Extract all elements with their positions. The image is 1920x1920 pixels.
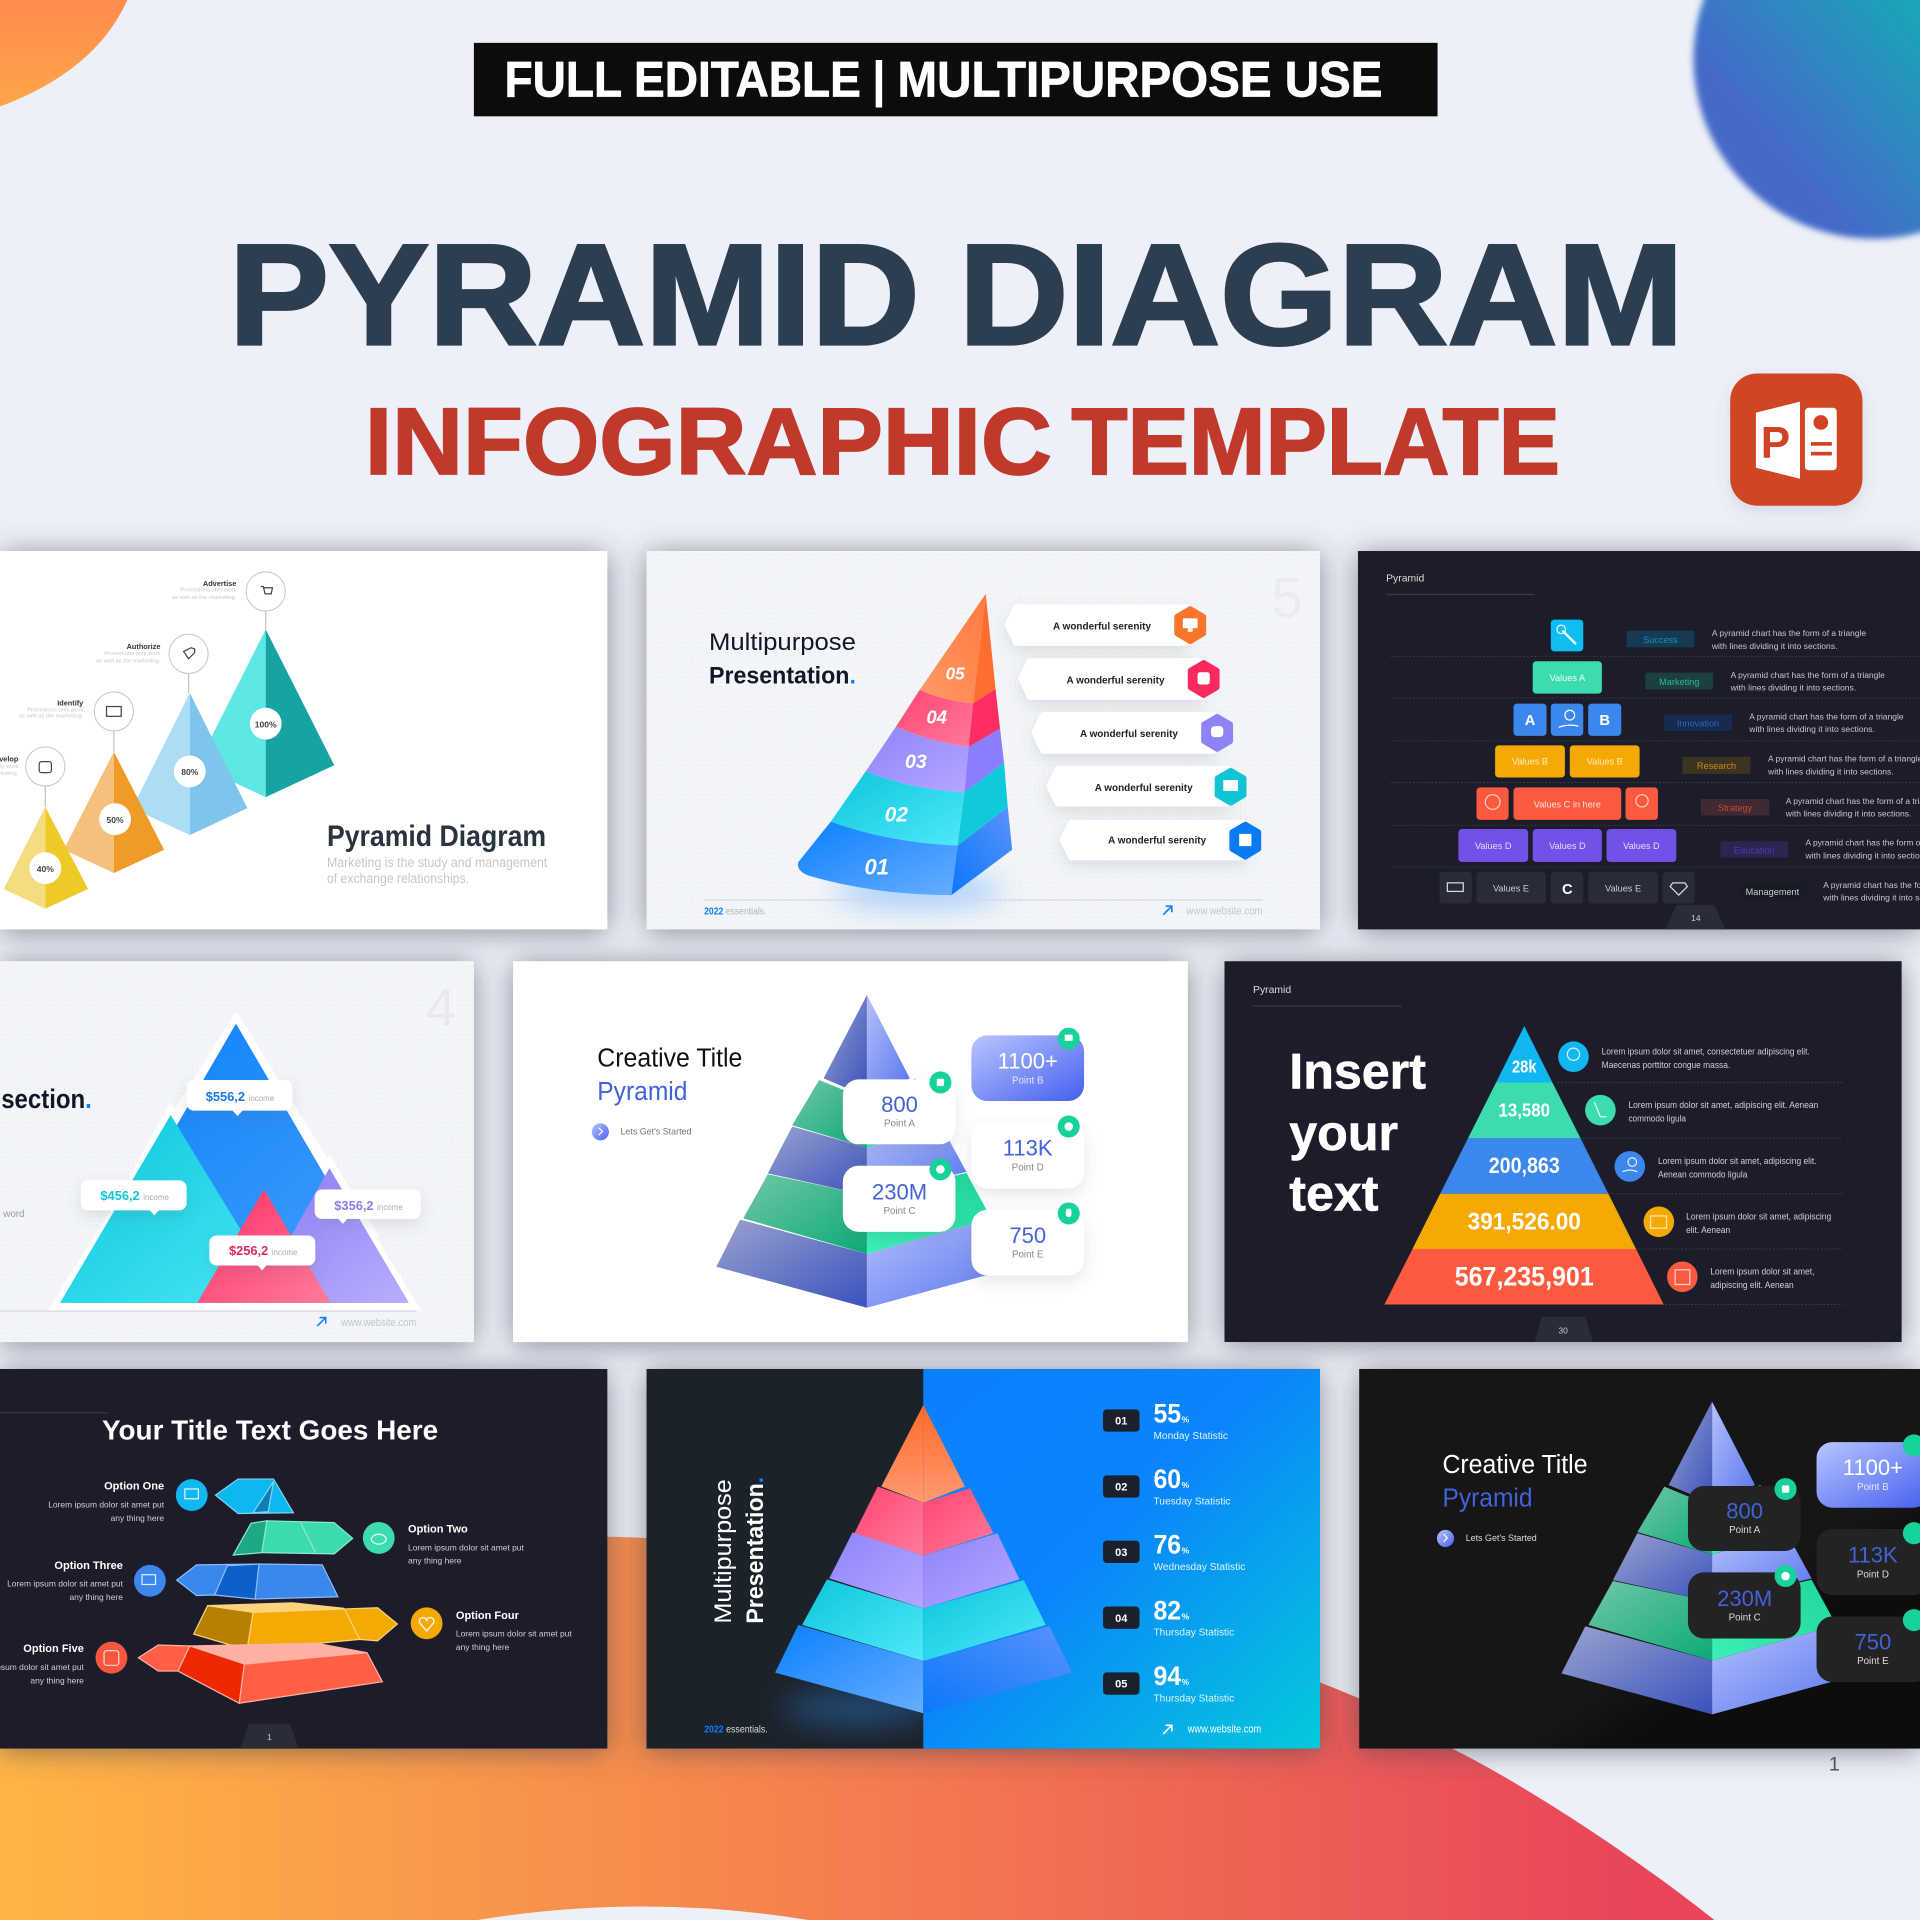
- 3D stepped pyramid: [716, 995, 1018, 1308]
- slide label: Pyramid: [1253, 985, 1291, 996]
- pyramid piece: yellow: [194, 1603, 397, 1650]
- card: 750 Point E: Point E: [1857, 1656, 1889, 1667]
- card: 800 Point A: 800: [881, 1092, 918, 1117]
- percentage badges: 100%: [255, 719, 277, 729]
- slide background: [1224, 961, 1902, 1342]
- blue triangle: [73, 1024, 399, 1303]
- card: 113K Point D: [971, 1116, 1084, 1188]
- option pills: [1008, 607, 1243, 857]
- bottom white arc: [478, 1907, 808, 1920]
- pyramid level numbers: 04: [927, 707, 947, 728]
- panel: creative title light slide: [513, 961, 1188, 1342]
- row 6 blocks: Values D: [1623, 841, 1660, 851]
- decorative blue corner blob: [1693, 0, 1920, 239]
- slide background: [1359, 1369, 1920, 1749]
- slide heading: your: [1289, 1105, 1398, 1161]
- statistic values: 76: [1153, 1530, 1181, 1560]
- slide description: [327, 855, 548, 886]
- footer rule: [0, 1310, 416, 1312]
- card: 800 Point A: [1688, 1478, 1801, 1551]
- option labels: any thing here: [408, 1556, 462, 1566]
- pyramid values: 13,580: [1499, 1100, 1550, 1121]
- pyramid values: 391,526.00: [1468, 1208, 1581, 1235]
- option icons: [96, 1479, 443, 1674]
- percentage badges: 80%: [181, 767, 199, 777]
- statistic values: 94: [1153, 1661, 1181, 1691]
- step labels: as well as the marketing.: [19, 714, 84, 720]
- pyramid piece: blue: [177, 1564, 338, 1599]
- row dividers: [1558, 1082, 1843, 1304]
- panel: pyramid diagram slide: [0, 551, 607, 929]
- row descriptions: with lines dividing it into sections.: [1785, 809, 1911, 819]
- option labels: Lorem ipsum dolor sit amet put: [48, 1500, 165, 1510]
- option labels: Option Five: [23, 1643, 84, 1655]
- panel: statistics split slide: [647, 1369, 1320, 1749]
- statistic values: %: [1182, 1611, 1190, 1621]
- row descriptions: elit. Aenean: [1686, 1225, 1730, 1235]
- pyramid level numbers: 05: [946, 664, 965, 684]
- card: 750 Point E: [1817, 1609, 1920, 1682]
- slide heading: [1442, 1451, 1588, 1513]
- 3D stepped pyramid: [1561, 1402, 1863, 1714]
- slide footer: www.website.com: [1186, 906, 1262, 918]
- slide footer: www.website.com: [1187, 1724, 1261, 1736]
- row descriptions: Aenean commodo ligula: [1658, 1169, 1747, 1179]
- percentage badges: [29, 708, 282, 884]
- option labels: any thing here: [69, 1592, 123, 1602]
- slide heading: Multipurpose: [709, 629, 856, 656]
- pyramid piece: cyan: [216, 1479, 293, 1513]
- category tags: Innovation: [1677, 719, 1719, 729]
- stacked pyramid: [1384, 1026, 1664, 1304]
- step labels: Promotions only work: [27, 707, 83, 713]
- row descriptions: adipiscing elit. Aenean: [1710, 1280, 1794, 1290]
- page tab: [1535, 1317, 1593, 1342]
- start button: Lets Get's Started: [620, 1126, 691, 1136]
- category tags: Research: [1697, 761, 1736, 771]
- slide footer: 2022 essentials.: [704, 907, 767, 918]
- card: 800 Point A: [843, 1071, 955, 1144]
- step labels: Authorize: [127, 642, 160, 651]
- white triangle backing: [48, 1011, 421, 1310]
- category tags: [1627, 631, 1806, 900]
- slide footer: www.website.com: [340, 1317, 416, 1329]
- card: 750 Point E: Point E: [1012, 1250, 1044, 1261]
- pill labels: A wonderful serenity: [1108, 836, 1206, 847]
- row dividers: [1391, 656, 1920, 867]
- slide description: of exchange relationships.: [327, 871, 469, 886]
- pill labels: [1053, 621, 1206, 847]
- subtitle: [365, 389, 1560, 494]
- statistic values: %: [1182, 1480, 1190, 1490]
- option labels: Option Three: [54, 1560, 123, 1572]
- callout: $356,2: $356,2 income: [334, 1198, 403, 1213]
- blue pyramid: [132, 693, 247, 835]
- percentage badges: 40%: [37, 864, 54, 874]
- start button: Lets Get's Started: [1466, 1533, 1537, 1543]
- row descriptions: Lorem ipsum dolor sit amet, adipiscing elit. Aenean: [1628, 1100, 1818, 1110]
- card: 800 Point A: 800: [1726, 1498, 1763, 1523]
- statistic badge numbers: 02: [1115, 1482, 1127, 1494]
- row 5 blocks: [1476, 787, 1658, 820]
- banner: |: [872, 52, 886, 109]
- option labels: Lorem ipsum dolor sit amet put: [7, 1579, 124, 1589]
- row icons: [1558, 1041, 1698, 1292]
- card: 1100+ Point B: 1100+: [998, 1048, 1058, 1073]
- slide footer: [704, 1724, 1261, 1736]
- teal triangle: [60, 1115, 285, 1303]
- slide background: [1358, 551, 1920, 929]
- panel: multipurpose 3D pyramid slide: [647, 551, 1320, 929]
- row 3 blocks: A: [1525, 713, 1536, 729]
- start button: [592, 1123, 691, 1140]
- statistic values: %: [1182, 1546, 1190, 1556]
- panel: creative title dark slide: [1359, 1369, 1920, 1749]
- slide heading: [597, 1045, 742, 1106]
- pyramid level numbers: [864, 664, 965, 879]
- row descriptions: A pyramid chart has the form of a triangle: [1731, 670, 1885, 680]
- page tab: [240, 1724, 299, 1749]
- callout: $256,2: [209, 1236, 315, 1270]
- statistic labels: Thursday Statistic: [1153, 1628, 1234, 1639]
- pyramid values: 28k: [1512, 1057, 1537, 1077]
- pyramid level numbers: 02: [885, 804, 908, 827]
- icon: PowerPoint logo: [1730, 373, 1862, 506]
- page tab: 30: [1558, 1325, 1568, 1335]
- panel: dark stacked pyramid table slide: [1358, 551, 1920, 929]
- vertical heading: Multipurpose: [710, 1479, 737, 1624]
- subtitle: INFOGRAPHIC: [365, 389, 1052, 494]
- right gradient half: [923, 1369, 1320, 1749]
- 3D pyramid: [775, 1405, 1072, 1713]
- card: 750 Point E: 750: [1854, 1630, 1891, 1655]
- row descriptions: Lorem ipsum dolor sit amet, adipiscing elit.: [1658, 1156, 1817, 1166]
- row descriptions: Lorem ipsum dolor sit amet, consectetuer adipiscing elit.: [1602, 1046, 1810, 1056]
- slide background: [513, 961, 1188, 1342]
- row 6 blocks: Values D: [1549, 841, 1586, 851]
- slide heading: Creative Title: [1442, 1451, 1588, 1479]
- slide background: [0, 1369, 607, 1749]
- slide heading: Presentation.: [709, 662, 856, 689]
- slide heading: Insert: [1289, 1044, 1426, 1100]
- card: 113K Point D: Point D: [1857, 1569, 1889, 1580]
- slide heading: [1289, 1044, 1426, 1222]
- pill labels: A wonderful serenity: [1095, 783, 1193, 794]
- step labels: Advertise: [203, 579, 236, 588]
- row 5 blocks: Values C in here: [1534, 800, 1601, 810]
- vertical heading: Presentation.: [742, 1477, 769, 1624]
- banner: MULTIPURPOSE USE: [898, 52, 1382, 108]
- card: 230M Point C: [1688, 1565, 1801, 1638]
- card: 113K Point D: 113K: [1003, 1136, 1053, 1161]
- pill labels: A wonderful serenity: [1080, 729, 1178, 740]
- step labels: as well as the marketing.: [172, 595, 237, 601]
- card: 230M Point C: 230M: [1717, 1586, 1772, 1611]
- row 2 blocks: [1533, 661, 1602, 694]
- statistic labels: Wednesday Statistic: [1153, 1562, 1245, 1573]
- connector lines: [45, 611, 266, 807]
- callout: $456,2: $456,2 income: [100, 1188, 169, 1203]
- hexagon icons: [1177, 609, 1259, 857]
- row 3 blocks: B: [1599, 713, 1610, 729]
- option labels: Lorem ipsum dolor sit amet put: [456, 1629, 572, 1639]
- page number: 1: [1829, 1754, 1840, 1776]
- option labels: any thing here: [456, 1642, 510, 1652]
- option labels: any thing here: [111, 1513, 164, 1523]
- title: [229, 215, 1684, 375]
- card: 800 Point A: Point A: [1729, 1525, 1761, 1536]
- purple triangle: [253, 1168, 409, 1303]
- row descriptions: commodo ligula: [1628, 1114, 1686, 1124]
- pyramid values: 200,863: [1489, 1153, 1560, 1178]
- icon circles: [26, 572, 285, 786]
- ghost slide number: 5: [1271, 566, 1303, 629]
- step labels: as well as the marketing.: [96, 658, 161, 664]
- banner: FULL EDITABLE: [504, 52, 861, 108]
- statistic values: %: [1182, 1677, 1190, 1687]
- panel: overlapping triangles slide: [0, 961, 474, 1342]
- category tags: Strategy: [1718, 803, 1753, 813]
- card: 1100+ Point B: [971, 1028, 1084, 1101]
- statistic values: %: [1182, 1414, 1190, 1424]
- card: 800 Point A: Point A: [884, 1119, 915, 1130]
- statistic values: 82: [1153, 1595, 1181, 1625]
- card: 230M Point C: Point C: [883, 1206, 916, 1217]
- category tags: Success: [1643, 635, 1678, 645]
- row descriptions: Lorem ipsum dolor sit amet, adipiscing: [1686, 1212, 1831, 1222]
- pyramid glow: [784, 1691, 931, 1725]
- row 4 blocks: Values B: [1512, 757, 1548, 767]
- slide heading: Pyramid Diagram: [327, 820, 546, 853]
- slide heading: Pyramid: [1442, 1485, 1533, 1513]
- teal pyramid: [197, 629, 334, 797]
- row descriptions: with lines dividing it into sections.: [1748, 724, 1875, 734]
- step labels: Promotions only work: [180, 587, 236, 593]
- page tab: [1665, 905, 1725, 929]
- row descriptions: with lines dividing it into sections.: [1767, 766, 1894, 776]
- slide heading: [709, 629, 856, 689]
- row descriptions: A pyramid chart has the form of a triangle: [1768, 754, 1920, 764]
- pill labels: A wonderful serenity: [1067, 675, 1165, 686]
- slide heading: Your Title Text Goes Here: [102, 1414, 438, 1445]
- statistic values: 60: [1153, 1464, 1181, 1494]
- banner: [474, 43, 1438, 116]
- decorative orange corner blob: [0, 0, 127, 107]
- slide label: Pyramid: [1386, 574, 1424, 585]
- row descriptions: Maecenas porttitor congue massa.: [1602, 1060, 1730, 1070]
- vertical heading: [710, 1477, 769, 1624]
- title: DIAGRAM: [959, 215, 1684, 375]
- row descriptions: with lines dividing it into sections.: [1730, 683, 1856, 693]
- yellow pyramid: [4, 807, 88, 909]
- option labels: Lorem ipsum dolor sit amet put: [408, 1543, 524, 1553]
- row 7 blocks: Values E: [1493, 883, 1529, 893]
- step labels: Promotions only work: [104, 651, 160, 657]
- statistic badge numbers: 04: [1115, 1613, 1128, 1625]
- option labels: Option Two: [408, 1524, 468, 1536]
- slide heading: text: [1289, 1166, 1379, 1222]
- slide shadow base: [647, 1369, 1320, 1749]
- pyramid values: [1455, 1057, 1594, 1292]
- row descriptions: Lorem ipsum dolor sit amet,: [1710, 1267, 1814, 1277]
- card: 230M Point C: [843, 1158, 955, 1232]
- pyramid glow: [833, 876, 1004, 907]
- option labels: Option Four: [456, 1610, 520, 1622]
- row 7 blocks: Values E: [1605, 883, 1641, 893]
- row descriptions: with lines dividing it into sections.: [1711, 641, 1837, 651]
- step labels: [0, 579, 237, 777]
- row 7 blocks: [1440, 872, 1695, 904]
- category tags: Education: [1734, 845, 1775, 855]
- callout: $556,2: $556,2 income: [206, 1089, 275, 1104]
- heading rule: [0, 1412, 108, 1414]
- card: 230M Point C: Point C: [1729, 1613, 1761, 1624]
- row 3 blocks: [1513, 704, 1621, 736]
- pyramid values: 567,235,901: [1455, 1262, 1594, 1292]
- statistic labels: [1153, 1431, 1245, 1704]
- option labels: any thing here: [30, 1675, 84, 1685]
- ghost slide number: 4: [426, 978, 456, 1038]
- slide background: [0, 961, 474, 1342]
- row 6 blocks: Values D: [1475, 841, 1512, 851]
- row 7 blocks: C: [1562, 882, 1573, 898]
- panel: insert your text dark slide: [1224, 961, 1902, 1342]
- panel: exploded pyramid slide: [0, 1369, 607, 1749]
- statistic badge numbers: 05: [1115, 1679, 1127, 1691]
- row 2 blocks: Values A: [1550, 673, 1586, 683]
- slide heading: Creative Title: [597, 1045, 742, 1073]
- option labels: Option One: [104, 1480, 164, 1492]
- 3D pyramid: [798, 594, 1012, 895]
- slide footer: [704, 900, 1262, 918]
- slide background: [0, 551, 607, 929]
- statistic badge numbers: 03: [1115, 1547, 1127, 1559]
- category tags: Marketing: [1659, 677, 1699, 687]
- statistic badges: [1103, 1409, 1140, 1695]
- pink triangle: [197, 1189, 331, 1303]
- option labels: [0, 1480, 572, 1685]
- pyramid level numbers: 01: [864, 854, 889, 879]
- bottom orange-red wave: [0, 1537, 1714, 1920]
- row descriptions: [1602, 1046, 1831, 1290]
- title: PYRAMID: [229, 215, 920, 375]
- row descriptions: A pyramid chart has the form of a triangle: [1712, 628, 1866, 638]
- slide background: [647, 551, 1320, 929]
- callout: $556,2: [187, 1080, 292, 1116]
- slide heading fragment: section.: [1, 1084, 92, 1114]
- start button: [1437, 1530, 1537, 1547]
- slide footer: 2022 essentials.: [704, 1725, 768, 1736]
- row 1 blocks: [1551, 620, 1583, 651]
- page tab: 14: [1691, 913, 1701, 923]
- card: 1100+ Point B: Point B: [1012, 1075, 1044, 1086]
- page tab: 1: [267, 1732, 272, 1742]
- pyramid piece: red: [138, 1643, 382, 1703]
- statistic labels: Tuesday Statistic: [1153, 1496, 1230, 1507]
- slide heading: Pyramid: [597, 1078, 687, 1106]
- row 4 blocks: Values B: [1587, 757, 1623, 767]
- card: 1100+ Point B: [1817, 1434, 1920, 1508]
- card: 230M Point C: 230M: [872, 1179, 927, 1204]
- pyramid piece: green: [233, 1521, 353, 1555]
- row descriptions: [1711, 628, 1920, 903]
- statistic values: 55: [1153, 1398, 1181, 1428]
- slide footer: [317, 1317, 416, 1329]
- orange pyramid: [64, 752, 164, 873]
- slide description: Marketing is the study and management: [327, 855, 548, 870]
- statistic badge numbers: [1115, 1416, 1128, 1691]
- step labels: Identify: [57, 698, 84, 707]
- row 6 blocks: [1458, 829, 1676, 862]
- statistic labels: Monday Statistic: [1153, 1431, 1228, 1442]
- row descriptions: A pyramid chart has the form of a triangle: [1749, 711, 1904, 721]
- callout: $356,2: [315, 1189, 421, 1224]
- row 4 blocks: [1495, 745, 1640, 778]
- card: 750 Point E: [971, 1202, 1084, 1275]
- card: 113K Point D: [1817, 1522, 1920, 1595]
- card: 113K Point D: 113K: [1848, 1542, 1898, 1567]
- subtitle: TEMPLATE: [1071, 389, 1560, 494]
- card: 1100+ Point B: 1100+: [1843, 1455, 1903, 1480]
- percentage badges: 50%: [107, 815, 124, 825]
- card: 750 Point E: 750: [1009, 1223, 1046, 1248]
- statistic values: [1153, 1398, 1190, 1691]
- card: 113K Point D: Point D: [1012, 1163, 1044, 1174]
- callout: $456,2: [81, 1180, 187, 1215]
- pyramid level numbers: 03: [905, 751, 927, 773]
- statistic labels: Thursday Statistic: [1153, 1693, 1234, 1704]
- callout: $256,2: $256,2 income: [229, 1243, 298, 1258]
- card: 1100+ Point B: Point B: [1857, 1482, 1889, 1493]
- category tags: Management: [1746, 887, 1800, 897]
- pill labels: A wonderful serenity: [1053, 621, 1151, 632]
- icon: PowerPoint logo: P: [1761, 419, 1790, 468]
- statistic badge numbers: 01: [1115, 1416, 1127, 1428]
